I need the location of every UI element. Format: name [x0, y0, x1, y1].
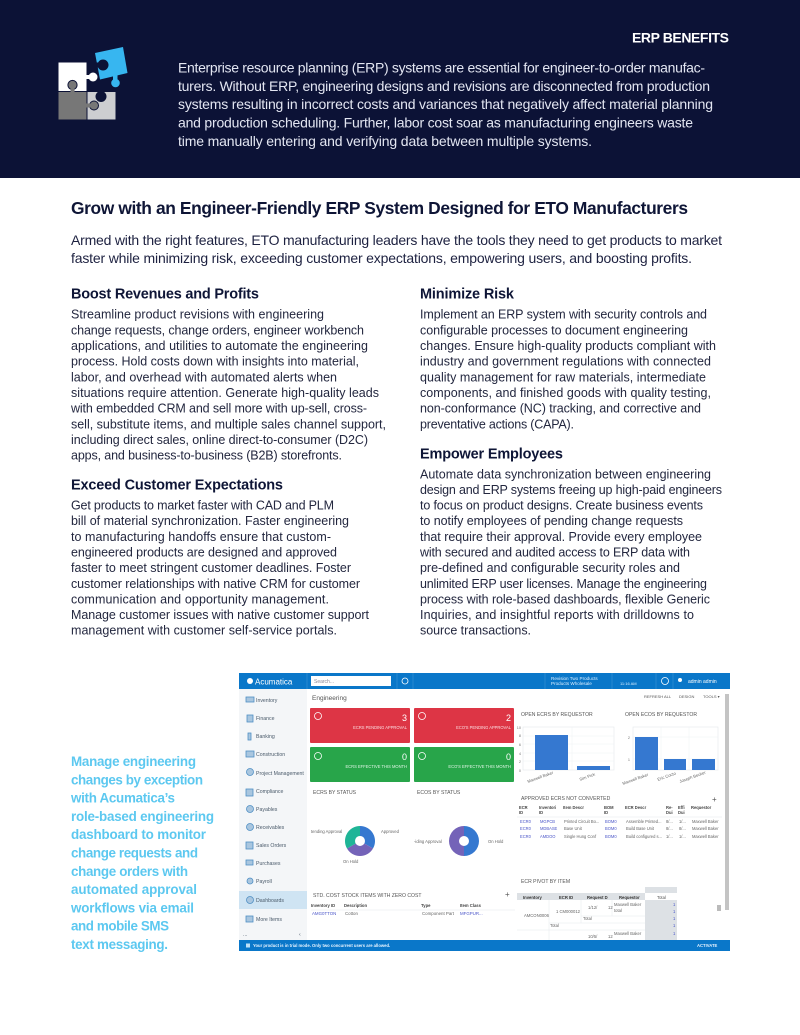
kpi card: ecos effective: ECO'S EFFECTIVE THIS MONTH: [448, 764, 511, 769]
table: approved ecrs not converted: ECR0: [520, 819, 532, 824]
top navigation bar: admin admin: [688, 679, 717, 685]
pivot table: Total: [657, 895, 666, 900]
table: approved ecrs not converted: Base Unit: [564, 826, 583, 831]
table: approved ecrs not converted: Maxwell Baker: [692, 826, 719, 831]
table: approved ecrs not converted: 1/...: [666, 834, 673, 839]
table: approved ecrs not converted: ID: [539, 810, 543, 815]
donut chart: ecos status: ECOS BY STATUS: [417, 790, 461, 796]
table: approved ecrs not converted: Maxwell Baker: [692, 834, 719, 839]
bar chart: open ecrs: 2: [519, 760, 521, 764]
section text: boost revenues: apps, and business-to-business (B2B) storefronts.: [71, 449, 342, 463]
header banner: [0, 0, 800, 178]
donut chart: ecos status: [414, 790, 504, 856]
scrollbar: [725, 694, 729, 910]
sidebar: Banking: [256, 734, 275, 740]
table: approved ecrs not converted: 8/...: [679, 826, 686, 831]
toolbar: REFRESH ALL: [644, 694, 672, 699]
main heading: Grow with an Engineer-Friendly ERP System Designed for ETO Manufacturers: [71, 198, 688, 218]
section text: boost revenues: Streamline product revisions with engineering: [71, 308, 324, 322]
section text: exceed expectations: Manage customer issues with native customer support: [71, 608, 370, 622]
donut chart: ecrs status: On Hold: [343, 859, 359, 864]
table: approved ecrs not converted: Requestor: [691, 805, 712, 810]
intro paragraph: systems resulting in incorrect costs and variances that negatively affect material planning: [178, 96, 713, 112]
table: approved ecrs not converted: Inventori: [539, 805, 556, 810]
table: approved ecrs not converted: BOM0: [605, 834, 617, 839]
kpi card: ecos effective: 0: [506, 752, 511, 762]
sidebar: Receivables: [256, 825, 285, 831]
table: approved ecrs not converted: Assemble Printed...: [626, 819, 662, 824]
table: std cost stock items: STD. COST STOCK ITEMS WITH ZERO COST: [313, 893, 421, 899]
table: std cost stock items: Item Class: [460, 903, 482, 908]
section text: minimize risk: Implement an ERP system with security controls and: [420, 308, 707, 322]
table: approved ecrs not converted: [517, 795, 722, 839]
callout caption: automated approval: [71, 882, 197, 897]
table: approved ecrs not converted: Single Hung Conf: [564, 834, 597, 839]
section text: boost revenues: process. Hold costs down with insights into material,: [71, 355, 359, 369]
table: approved ecrs not converted: ECR Descr: [625, 805, 647, 810]
pivot table: [517, 879, 721, 940]
table: approved ecrs not converted: MGPCB: [540, 819, 555, 824]
pivot table: 1: [673, 931, 676, 936]
table: std cost stock items: Description: [344, 903, 367, 908]
top navigation bar: 11:16 AM: [620, 681, 637, 686]
section text: minimize risk: [420, 308, 716, 431]
table: std cost stock items: MFGPUR...: [460, 911, 483, 916]
dashboard screenshot: DESIGN: [679, 694, 694, 699]
section text: empower employees: that require their approval. Provide every employee: [420, 530, 702, 544]
section heading: empower employees: Empower Employees: [420, 446, 563, 462]
table: approved ecrs not converted: MDBASE: [540, 826, 558, 831]
kpi card: ecrs effective: 0: [402, 752, 407, 762]
section text: boost revenues: [70, 308, 386, 463]
bar chart: open ecrs: Maxwell Baker: [527, 770, 554, 784]
section text: empower employees: process with role-based dashboards, flexible Generic: [420, 592, 710, 606]
table: std cost stock items: +: [505, 890, 510, 899]
kpi card: ecrs pending: 3: [402, 713, 407, 723]
callout caption: change requests and: [71, 846, 198, 860]
trial notice bar: [239, 940, 730, 951]
lead paragraph: [71, 232, 722, 266]
bar chart: open ecrs: OPEN ECRS BY REQUESTOR: [521, 712, 593, 718]
section text: boost revenues: sell, substitute items, and multiple sales channel support,: [71, 417, 386, 431]
section text: boost revenues: applications, and utilities to automate the engineering: [71, 339, 368, 353]
table: approved ecrs not converted: BOM0: [605, 819, 617, 824]
pivot table: 12: [608, 934, 613, 939]
section text: empower employees: design and ERP systems freeing up high-paid engineers: [420, 483, 722, 497]
section text: exceed expectations: to manufacturing handoffs ensure that custom-: [71, 530, 331, 544]
bar chart: open ecrs: 4: [519, 752, 521, 756]
section text: minimize risk: non-conformance (NC) tracking, and corrective and: [420, 402, 701, 416]
table: approved ecrs not converted: Re-: [666, 805, 673, 810]
table: std cost stock items: Type: [421, 903, 431, 908]
pivot table: 1 CM000012: [556, 909, 581, 914]
trial notice bar: Your product is in trial mode. Only two concurrent users are allowed.: [253, 943, 390, 948]
callout caption: role-based engineering: [71, 809, 214, 824]
section text: boost revenues: with embedded CRM and sell more with up-sell, cross-: [70, 402, 367, 416]
section text: minimize risk: changes. Ensure high-quality products compliant with: [420, 339, 716, 353]
icon: puzzle pieces: [58, 47, 128, 120]
bar chart: open ecrs: 10: [517, 726, 521, 730]
table: approved ecrs not converted: ECR0: [520, 834, 532, 839]
pivot table: Inventory: [523, 895, 543, 900]
sidebar: [239, 689, 307, 940]
dashboard screenshot: [239, 673, 730, 951]
sidebar: Sales Orders: [256, 843, 287, 849]
top navigation bar: Acumatica: [255, 678, 293, 686]
table: std cost stock items: Cotton: [345, 911, 358, 916]
section text: minimize risk: components, and finished goods with quality testing,: [420, 386, 711, 400]
intro paragraph: time manually entering and verifying data between multiple systems.: [178, 133, 592, 149]
top navigation bar: Revision Two Products: [551, 676, 598, 681]
section text: empower employees: with secured and audited access to ERP data with: [419, 546, 690, 560]
pivot table: 1: [673, 923, 676, 928]
pivot table: 1: [673, 909, 676, 914]
bar chart: open ecos: Eric Cocto: [657, 770, 677, 782]
callout caption: Manage engineering: [71, 754, 196, 769]
sidebar: More Items: [256, 917, 282, 923]
section text: minimize risk: industry and government regulations with connected: [420, 355, 711, 369]
table: std cost stock items: [311, 890, 515, 916]
lead paragraph: faster while minimizing risk, exceeding customer expectations, empowering users, and boosting profits.: [71, 250, 692, 266]
kpi card: ecos pending: ECO'S PENDING APPROVAL: [456, 725, 512, 730]
sidebar: ‹: [299, 932, 301, 938]
table: approved ecrs not converted: ECR: [519, 805, 528, 810]
section text: boost revenues: labor, and overhead with automated alerts when: [71, 370, 337, 384]
donut chart: ecrs status: Approved: [381, 829, 400, 834]
section text: exceed expectations: engineered products are designed and approved: [71, 546, 337, 560]
table: approved ecrs not converted: +: [712, 795, 717, 804]
pivot table: 1: [673, 916, 676, 921]
kpi card: ecos effective: [414, 747, 514, 782]
sidebar: Construction: [256, 752, 285, 758]
pivot table: Requestor: [619, 895, 640, 900]
donut chart: ecos status: On Hold: [488, 839, 504, 844]
label: ERP benefits: ERP BENEFITS: [632, 30, 729, 46]
section text: boost revenues: change requests, change orders, engineer workbench: [71, 323, 364, 337]
table: approved ecrs not converted: Build configured s...: [626, 834, 662, 839]
sidebar: ...: [243, 932, 247, 938]
pivot table: 1/12/: [588, 905, 598, 910]
table: approved ecrs not converted: ID: [519, 810, 523, 815]
callout caption: with Acumatica’s: [70, 791, 175, 806]
dashboard screenshot: TOOLS ▾: [703, 694, 720, 699]
table: approved ecrs not converted: 8/...: [666, 826, 673, 831]
intro paragraph: Enterprise resource planning (ERP) systems are essential for engineer-to-order manufac-: [178, 60, 705, 76]
section heading: exceed expectations: Exceed Customer Expectations: [71, 478, 283, 494]
kpi card: ecos pending: [414, 708, 514, 743]
pivot table: ECR PIVOT BY ITEM: [521, 879, 570, 885]
section text: exceed expectations: management with customer self-service portals.: [71, 624, 337, 638]
kpi card: ecrs effective: [310, 747, 410, 782]
kpi card: ecrs effective: ECRS EFFECTIVE THIS MONTH: [345, 764, 407, 769]
top navigation bar: Search...: [314, 679, 334, 685]
sidebar: Project Management: [256, 771, 304, 777]
section text: exceed expectations: faster to meet stringent customer deadlines. Foster: [71, 561, 351, 575]
bar chart: open ecrs: 6: [519, 743, 521, 747]
section text: boost revenues: including direct sales, online direct-to-consumer (D2C): [71, 433, 368, 447]
bar chart: open ecos: Joseph Becker: [679, 770, 707, 784]
section text: exceed expectations: bill of material synchronization. Faster engineering: [71, 514, 349, 528]
section heading: minimize risk: Minimize Risk: [420, 286, 515, 302]
table: approved ecrs not converted: Item Descr: [563, 805, 584, 810]
sidebar: Purchases: [256, 861, 281, 867]
pivot table: AMCON0006: [524, 913, 550, 918]
pivot table: Request D: [587, 895, 608, 900]
callout caption: dashboard to monitor: [71, 827, 207, 842]
table: approved ecrs not converted: BOM: [604, 805, 614, 810]
top navigation bar: Products Wholesale: [551, 681, 592, 686]
sidebar: Payables: [256, 807, 278, 813]
kpi card: ecos pending: 2: [506, 713, 511, 723]
section text: minimize risk: configurable processes to document engineering: [420, 323, 688, 337]
callout caption: change orders with: [71, 864, 188, 879]
section text: boost revenues: situations require attention. Generate high-quality leads: [71, 386, 379, 400]
donut chart: ecrs status: ECRS BY STATUS: [313, 790, 357, 796]
table: approved ecrs not converted: Build Base Unit: [626, 826, 655, 831]
bar chart: open ecos: 1: [628, 758, 630, 762]
pivot table: Maxwell Baker: [614, 902, 642, 907]
callout caption: and mobile SMS: [71, 919, 169, 934]
pivot table: 1: [673, 902, 676, 907]
table: approved ecrs not converted: AMDOO: [540, 834, 555, 839]
table: approved ecrs not converted: ID: [604, 810, 608, 815]
table: approved ecrs not converted: Maxwell Baker: [692, 819, 719, 824]
section text: empower employees: to notify employees of pending change requests: [420, 514, 683, 528]
table: approved ecrs not converted: 1/...: [679, 834, 686, 839]
bar chart: open ecrs: 0: [519, 769, 521, 773]
bar chart: open ecrs: [517, 712, 614, 784]
section text: empower employees: [419, 467, 722, 638]
pivot table: 12: [608, 905, 613, 910]
intro paragraph: [178, 60, 713, 149]
table: approved ecrs not converted: Printed Circuit Bo...: [564, 819, 599, 824]
sidebar: Compliance: [256, 789, 284, 795]
pivot table: Maxwell Baker: [614, 931, 642, 936]
bar chart: open ecos: [622, 712, 718, 786]
intro paragraph: and production scheduling. Further, labor cost soar as manufacturing engineers waste: [178, 115, 693, 131]
bar chart: open ecos: 2: [628, 736, 630, 740]
lead paragraph: Armed with the right features, ETO manufacturing leaders have the tools they need to get products to market: [71, 232, 722, 248]
section text: empower employees: to focus on product designs. Create business events: [420, 499, 703, 513]
trial notice bar: ACTIVATE: [697, 943, 718, 948]
section text: exceed expectations: customer relationships with native CRM for customer: [71, 577, 360, 591]
pivot table: 10/5/: [588, 934, 598, 939]
table: approved ecrs not converted: Dui: [666, 810, 673, 815]
section text: minimize risk: quality management for raw materials, intermediate: [420, 370, 706, 384]
section text: empower employees: unlimited ERP user licenses. Manage the engineering: [420, 577, 707, 591]
sidebar: Dashboards: [256, 898, 284, 904]
callout caption: text messaging.: [71, 937, 168, 952]
sidebar: Inventory: [256, 698, 278, 704]
sidebar: Finance: [256, 716, 275, 722]
table: std cost stock items: Component Part: [422, 911, 455, 916]
kpi card: ecrs pending: ECRS PENDING APPROVAL: [353, 725, 408, 730]
callout caption: changes by exception: [71, 772, 203, 787]
kpi card: ecrs pending: [310, 708, 410, 743]
top navigation bar: [239, 673, 730, 689]
table: approved ecrs not converted: 8/...: [666, 819, 673, 824]
table: approved ecrs not converted: 1/...: [679, 819, 686, 824]
page title: Engineering: [312, 695, 347, 702]
section text: empower employees: Inquiries, and insightful reports with drilldowns to: [420, 608, 694, 622]
section text: exceed expectations: communication and opportunity management.: [71, 592, 329, 606]
section text: empower employees: source transactions.: [420, 624, 531, 638]
section text: empower employees: Automate data synchronization between engineering: [420, 467, 711, 481]
table: approved ecrs not converted: ECR0: [520, 826, 532, 831]
sidebar: Payroll: [256, 879, 272, 885]
pivot table: Total: [550, 923, 559, 928]
bar chart: open ecos: OPEN ECOS BY REQUESTOR: [625, 712, 697, 718]
donut chart: ecrs status: tending Approval: [311, 829, 342, 834]
donut chart: ecrs status: [311, 790, 400, 864]
table: approved ecrs not converted: Dui: [678, 810, 685, 815]
table: approved ecrs not converted: BOM0: [605, 826, 617, 831]
section text: minimize risk: preventative actions (CAPA).: [420, 417, 574, 431]
section text: exceed expectations: [71, 498, 370, 638]
pivot table: total: [614, 908, 622, 913]
section text: empower employees: pre-defined and configurable security roles and: [420, 561, 680, 575]
intro paragraph: turers. Without ERP, engineering designs and revisions are disconnected from production: [178, 78, 710, 94]
table: std cost stock items: Inventory ID: [311, 903, 335, 908]
pivot table: Total: [583, 916, 592, 921]
table: approved ecrs not converted: APPROVED ECRS NOT CONVERTED: [521, 796, 611, 802]
bar chart: open ecrs: 8: [519, 734, 521, 738]
donut chart: ecos status: -iding Approval: [414, 839, 442, 844]
callout caption: [70, 754, 214, 952]
section text: exceed expectations: Get products to market faster with CAD and PLM: [71, 498, 334, 512]
bar chart: open ecrs: Sim Pick: [579, 771, 596, 782]
section heading: boost revenues: Boost Revenues and Profits: [71, 286, 259, 302]
table: approved ecrs not converted: Effi: [678, 805, 685, 810]
bar chart: open ecos: Maxwell Baker: [622, 772, 649, 786]
table: std cost stock items: AMG0TTON: [312, 911, 336, 916]
callout caption: workflows via email: [70, 900, 194, 915]
pivot table: ECR ID: [559, 895, 573, 900]
